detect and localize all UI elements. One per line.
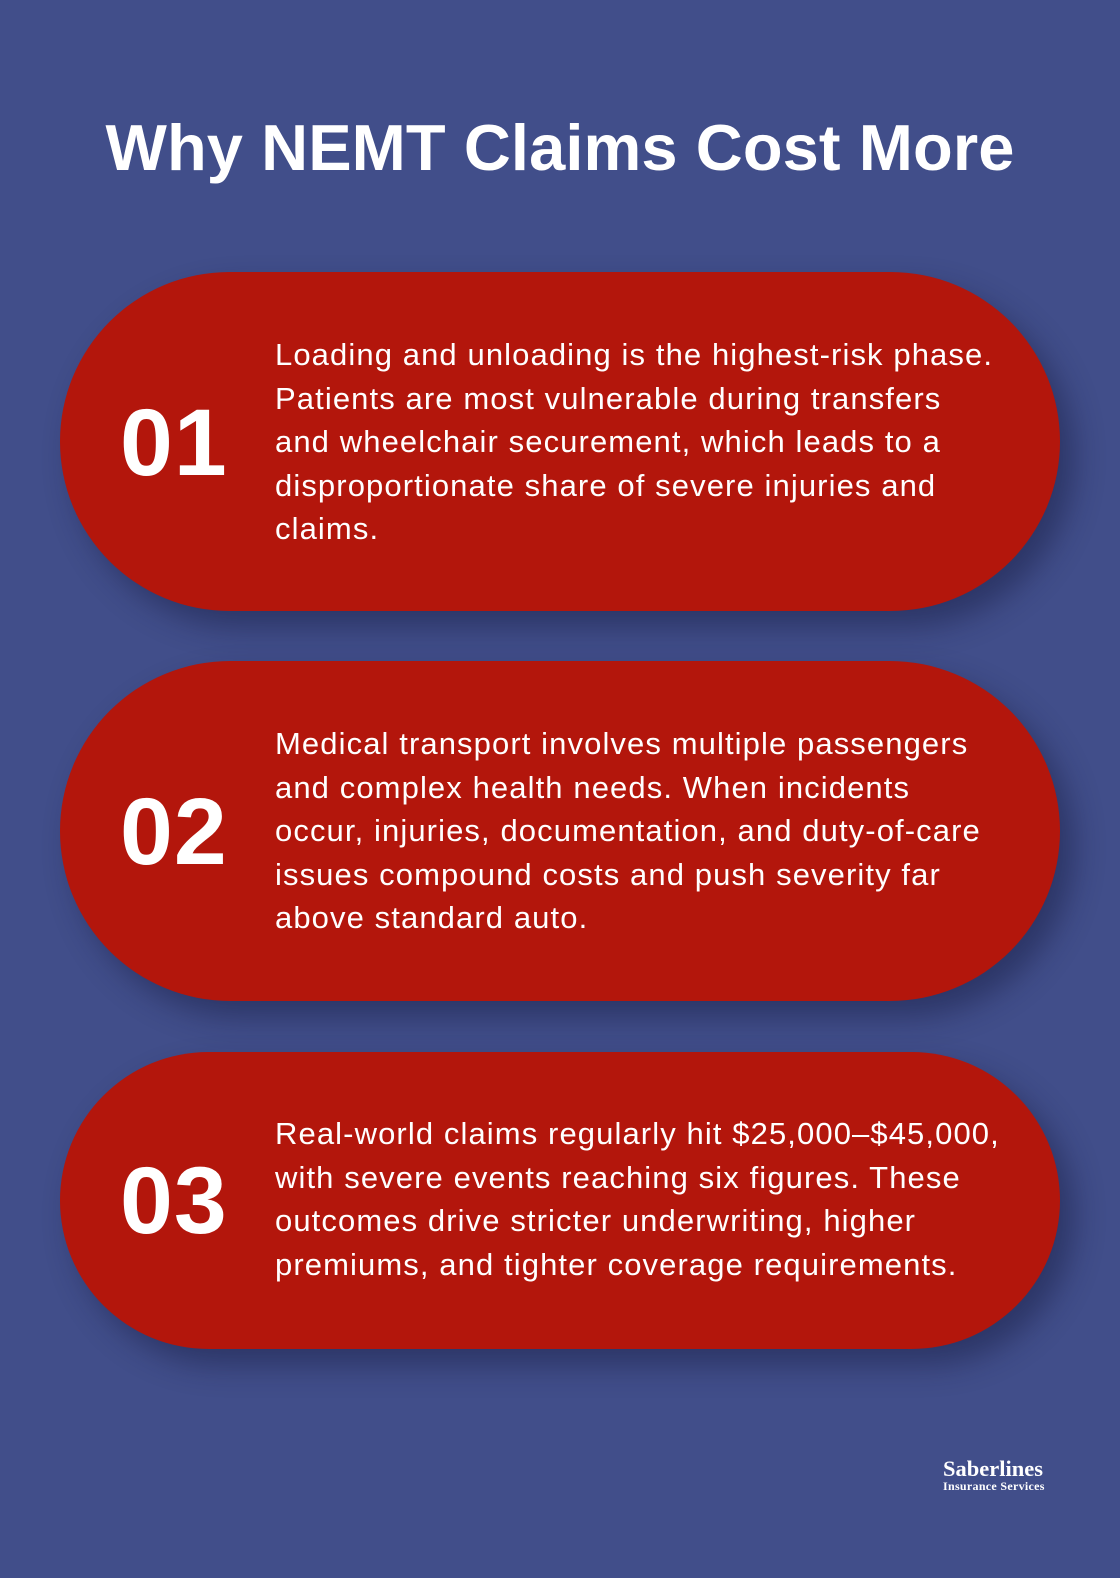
text 02: Medical transport involves multiple passengers bbox=[275, 726, 968, 761]
text 02: issues compound costs and push severity far bbox=[275, 856, 941, 892]
text 03: with severe events reaching six figures. These bbox=[275, 1160, 961, 1194]
text 02: above standard auto. bbox=[275, 900, 588, 935]
text 01: claims. bbox=[275, 511, 379, 546]
text 03: premiums, and tighter coverage requirements. bbox=[275, 1246, 957, 1282]
text 02 bbox=[275, 726, 981, 935]
number 01: 01 bbox=[120, 390, 228, 496]
text 02: and complex health needs. When incidents bbox=[275, 770, 910, 804]
text 03 bbox=[275, 1116, 1000, 1282]
text 03: outcomes drive stricter underwriting, higher bbox=[275, 1203, 916, 1238]
text 01: Loading and unloading is the highest-risk phase. bbox=[275, 337, 993, 372]
text 01: disproportionate share of severe injuries and bbox=[275, 468, 936, 502]
text 01: Patients are most vulnerable during transfers bbox=[275, 380, 941, 416]
panel: 01 bbox=[60, 272, 1060, 611]
text 03: Real-world claims regularly hit $25,000–$45,000, bbox=[275, 1116, 1000, 1151]
text 02: occur, injuries, documentation, and duty-of-care bbox=[275, 813, 981, 848]
text 01 bbox=[275, 337, 993, 546]
title: Why NEMT Claims Cost More bbox=[106, 111, 1014, 184]
number 03: 03 bbox=[120, 1148, 228, 1254]
text 01: and wheelchair securement, which leads to a bbox=[275, 424, 941, 459]
panel: 03 bbox=[60, 1052, 1060, 1349]
panel: 02 bbox=[60, 661, 1060, 1001]
logo: Saberlines bbox=[943, 1456, 1043, 1481]
logo: Insurance Services bbox=[943, 1479, 1045, 1493]
logo bbox=[943, 1456, 1045, 1493]
number 02: 02 bbox=[120, 779, 228, 885]
